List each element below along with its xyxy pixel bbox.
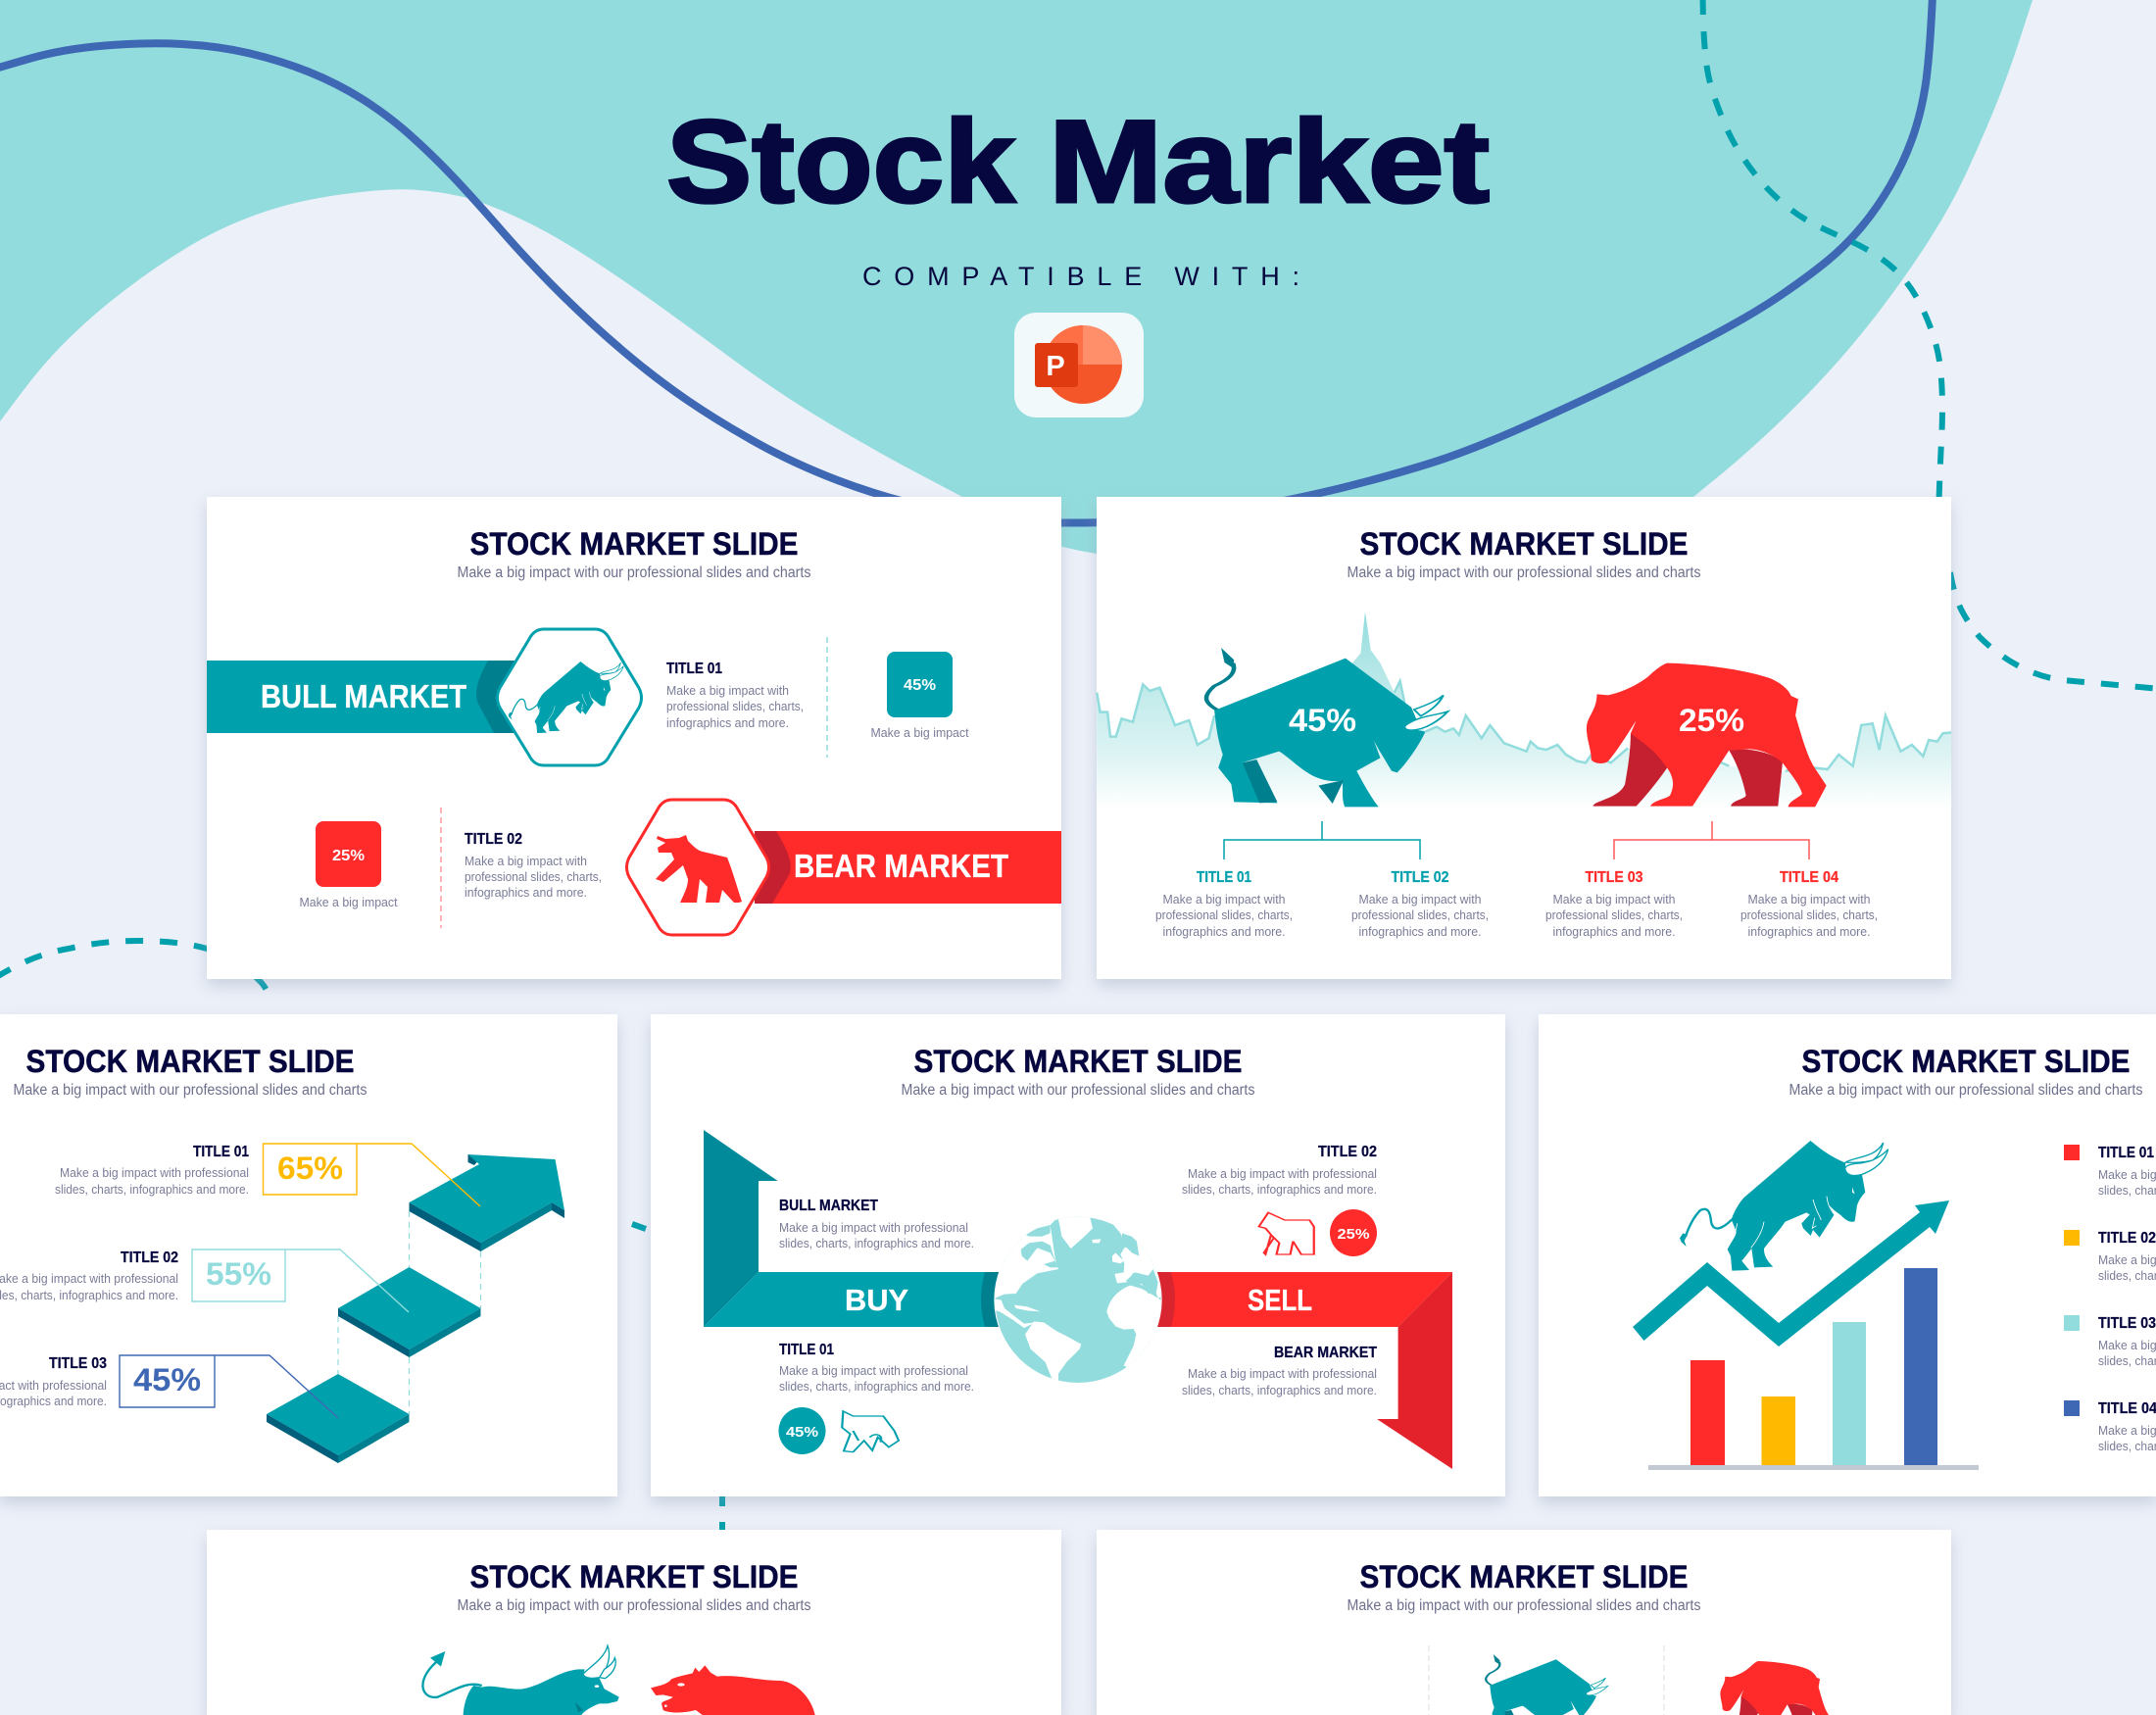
stat 25 percent: Make a big impact	[300, 896, 398, 909]
title 02 text: TITLE 02	[465, 831, 522, 848]
column title 04: infographics and more.	[1748, 925, 1870, 939]
bull market text	[779, 1198, 974, 1250]
bear market banner	[755, 831, 1061, 904]
heading: STOCK MARKET SLIDE	[470, 1559, 798, 1594]
bar chart	[1648, 1268, 1979, 1470]
icon: bear with 25 percent	[1587, 663, 1827, 807]
legend item 01	[2064, 1145, 2156, 1198]
icon: bull	[509, 662, 623, 733]
column title 03	[1545, 869, 1683, 939]
heading: STOCK MARKET SLIDE	[913, 1044, 1243, 1079]
panel: bull on rising bar chart	[1539, 1014, 2156, 1496]
title 01 text: TITLE 01	[779, 1342, 834, 1358]
callout 45 percent	[120, 1355, 338, 1418]
panel: buy and sell globe	[651, 1014, 1505, 1496]
heading: STOCK MARKET SLIDE	[1360, 1559, 1688, 1594]
icon: bull outline	[842, 1411, 899, 1452]
bull market text: slides, charts, infographics and more.	[779, 1237, 974, 1250]
bear market text	[1182, 1345, 1377, 1397]
top arrow step	[410, 1154, 564, 1251]
badge 45 percent	[778, 1407, 825, 1454]
callout 65 percent: 65%	[277, 1151, 343, 1186]
title 02 text: infographics and more.	[465, 886, 587, 900]
bottom step	[267, 1374, 410, 1463]
panel: facing bull and bear	[207, 1530, 1061, 1715]
title 02 text: TITLE 02	[1318, 1144, 1377, 1160]
step texts 01: slides, charts, infographics and more.	[55, 1183, 249, 1197]
teal hero blob	[0, 0, 2033, 570]
bear market banner: BEAR MARKET	[794, 848, 1008, 884]
step texts 01: TITLE 01	[193, 1144, 249, 1160]
column title 04: Make a big impact with	[1748, 893, 1871, 906]
legend item 03	[2064, 1315, 2156, 1368]
icon: bear	[656, 835, 742, 903]
icon: bear outline	[1259, 1212, 1314, 1254]
column title 03: Make a big impact with	[1552, 893, 1676, 906]
title 02 text: slides, charts, infographics and more.	[1182, 1183, 1377, 1197]
column title 02	[1351, 869, 1489, 939]
main title: Stock	[666, 96, 1015, 227]
title 01 text	[779, 1342, 974, 1394]
title 01 text: Make a big impact with professional	[779, 1364, 968, 1378]
badge 25 percent	[1330, 1209, 1377, 1256]
globe	[990, 1212, 1166, 1384]
callout 65 percent	[263, 1144, 480, 1206]
bull market text: Make a big impact with professional	[779, 1221, 968, 1235]
legend item 04	[2064, 1400, 2156, 1453]
callout 55 percent: 55%	[206, 1256, 271, 1292]
icon: bull with 45 percent: 45%	[1289, 703, 1356, 738]
bull market banner	[207, 661, 519, 733]
step texts 03	[0, 1355, 107, 1408]
bracket red	[1614, 821, 1809, 859]
stat 45 percent: 45%	[904, 677, 936, 694]
icon: facing bear	[651, 1665, 815, 1715]
callout 55 percent	[192, 1250, 409, 1312]
step texts 01	[55, 1144, 249, 1197]
bear market text: BEAR MARKET	[1274, 1345, 1377, 1361]
badge 45 percent: 45%	[786, 1424, 818, 1441]
column title 02: professional slides, charts,	[1351, 908, 1489, 922]
column title 04: TITLE 04	[1780, 869, 1838, 886]
bear market text: slides, charts, infographics and more.	[1182, 1384, 1377, 1397]
heading: STOCK MARKET SLIDE	[1360, 526, 1688, 562]
icon: bull with 45 percent	[1206, 648, 1447, 807]
main title	[666, 96, 1490, 227]
middle step	[338, 1267, 480, 1357]
panel: bull and bear columns	[1097, 1530, 1951, 1715]
title 01 text: slides, charts, infographics and more.	[779, 1380, 974, 1394]
column title 02: infographics and more.	[1358, 925, 1482, 939]
bear hexagon	[627, 800, 768, 935]
icon: bull cropped	[1486, 1654, 1608, 1715]
bull hexagon	[498, 629, 641, 765]
title 01 text: TITLE 01	[666, 661, 722, 677]
sell arrow: SELL	[1248, 1283, 1312, 1317]
buy arrow: BUY	[845, 1283, 908, 1317]
column title 02: Make a big impact with	[1358, 893, 1482, 906]
panel: bull versus bear chart	[1097, 497, 1951, 979]
subheading: Make a big impact with our professional slides and charts	[1347, 1597, 1701, 1614]
title 01 text: professional slides, charts,	[666, 700, 804, 713]
column title 03: TITLE 03	[1586, 869, 1643, 886]
column title 01	[1155, 869, 1293, 939]
heading: STOCK MARKET SLIDE	[1801, 1044, 2131, 1079]
step texts 03: TITLE 03	[49, 1355, 107, 1372]
stat 45 percent: Make a big impact	[870, 726, 969, 740]
legend item 02	[2064, 1230, 2156, 1283]
title 02 text	[465, 831, 602, 900]
price line chart	[1097, 612, 1951, 808]
bull market banner: BULL MARKET	[261, 678, 466, 714]
column title 02: TITLE 02	[1392, 869, 1449, 886]
subheading: Make a big impact with our professional slides and charts	[1347, 564, 1701, 581]
subheading: Make a big impact with our professional slides and charts	[457, 564, 811, 581]
title 02 text: Make a big impact with professional	[1188, 1167, 1377, 1181]
buy arrow	[704, 1130, 1004, 1327]
sell arrow	[1152, 1272, 1452, 1469]
column title 01: Make a big impact with	[1162, 893, 1286, 906]
step texts 02	[0, 1250, 178, 1302]
column title 04: professional slides, charts,	[1740, 908, 1878, 922]
blue wave line	[0, 0, 1933, 523]
column title 04	[1740, 869, 1878, 939]
icon: bear cropped	[1720, 1661, 1834, 1715]
heading: STOCK MARKET SLIDE	[25, 1044, 355, 1079]
column title 01: infographics and more.	[1162, 925, 1286, 939]
title 01 text: Make a big impact with	[666, 684, 789, 698]
callout 45 percent: 45%	[133, 1362, 201, 1397]
column title 01: TITLE 01	[1197, 869, 1251, 886]
step texts 02: TITLE 02	[121, 1250, 178, 1266]
icon: charging bull	[1680, 1141, 1888, 1271]
column title 03: professional slides, charts,	[1545, 908, 1683, 922]
step texts 01: Make a big impact with professional	[60, 1166, 249, 1180]
icon: bear with 25 percent: 25%	[1679, 703, 1744, 738]
badge 25 percent: 25%	[1337, 1226, 1370, 1243]
title 02 text	[1182, 1144, 1377, 1197]
bull market text: BULL MARKET	[779, 1198, 878, 1214]
main title: Market	[1049, 96, 1490, 227]
bracket teal	[1224, 821, 1420, 859]
bear market text: Make a big impact with professional	[1188, 1367, 1377, 1381]
stat 25 percent: 25%	[332, 848, 365, 864]
subheading: Make a big impact with our professional slides and charts	[14, 1082, 368, 1099]
panel: bull and bear market	[207, 497, 1061, 979]
title 02 text: Make a big impact with	[465, 855, 587, 868]
stat 25 percent	[300, 821, 398, 909]
compatible with label: COMPATIBLE WITH:	[862, 262, 1299, 291]
panel: isometric steps	[0, 1014, 617, 1496]
legend	[2064, 1145, 2156, 1453]
column title 03: infographics and more.	[1552, 925, 1676, 939]
icon: powerpoint	[1014, 313, 1144, 417]
stat 45 percent	[870, 652, 969, 740]
icon: powerpoint: P	[1046, 351, 1065, 382]
rising zigzag arrow	[1633, 1200, 1949, 1347]
title 01 text: infographics and more.	[666, 716, 789, 730]
title 01 text	[666, 661, 804, 730]
title 02 text: professional slides, charts,	[465, 870, 602, 884]
column title 01: professional slides, charts,	[1155, 908, 1293, 922]
subheading: Make a big impact with our professional slides and charts	[902, 1082, 1255, 1099]
heading: STOCK MARKET SLIDE	[470, 526, 798, 562]
icon: facing bull	[422, 1645, 619, 1715]
subheading: Make a big impact with our professional slides and charts	[457, 1597, 811, 1614]
